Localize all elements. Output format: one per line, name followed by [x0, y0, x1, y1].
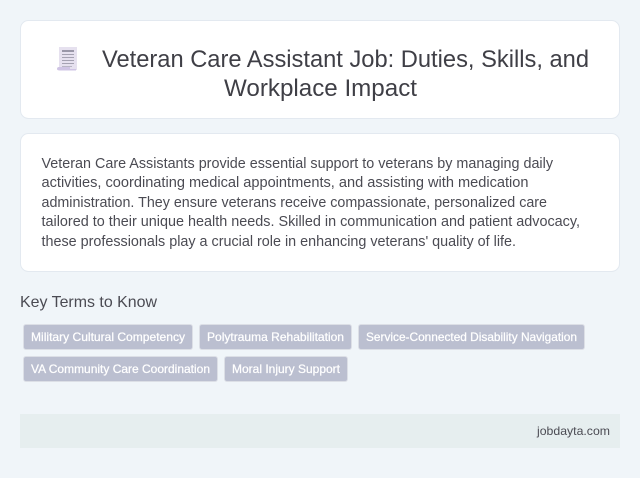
title: Workplace Impact — [224, 75, 417, 102]
text block: description: activities, coordinating medical appointments, and assisting with medication — [42, 175, 528, 191]
footer bar: jobdayta.com — [536, 424, 610, 438]
text block: description: Veteran Care Assistants provide essential support to veterans by managing daily — [42, 156, 554, 172]
tag: moral injury support: Moral Injury Support — [232, 362, 341, 376]
panel: description card — [20, 134, 620, 272]
tag: polytrauma rehabilitation: Polytrauma Rehabilitation — [207, 330, 344, 344]
tag: military cultural competency: Military Cultural Competency — [31, 330, 185, 344]
tag: va community care coordination — [24, 356, 218, 382]
panel: title card — [20, 20, 620, 118]
footer bar — [20, 414, 620, 448]
text block: description — [42, 156, 580, 250]
text block: description: tailored to their unique health needs. Skilled in communication and patient advocacy, — [42, 214, 580, 230]
icon: document scroll — [57, 47, 77, 70]
tag: moral injury support — [224, 356, 348, 382]
tag: military cultural competency — [24, 324, 192, 350]
tag: polytrauma rehabilitation — [200, 324, 352, 350]
title: Veteran Care Assistant Job: Duties, Skills, and — [102, 46, 589, 73]
text block: description: administration. They ensure veterans receive compassionate, personalized care — [42, 195, 547, 211]
tag: va community care coordination: VA Community Care Coordination — [31, 362, 210, 376]
title — [102, 46, 589, 102]
text block: description: these professionals play a crucial role in enhancing veterans' quality of life. — [42, 234, 516, 250]
tag: service-connected disability navigation — [358, 324, 584, 350]
tag: service-connected disability navigation: Service-Connected Disability Navigation — [366, 330, 577, 344]
heading: key terms: Key Terms to Know — [20, 294, 157, 311]
